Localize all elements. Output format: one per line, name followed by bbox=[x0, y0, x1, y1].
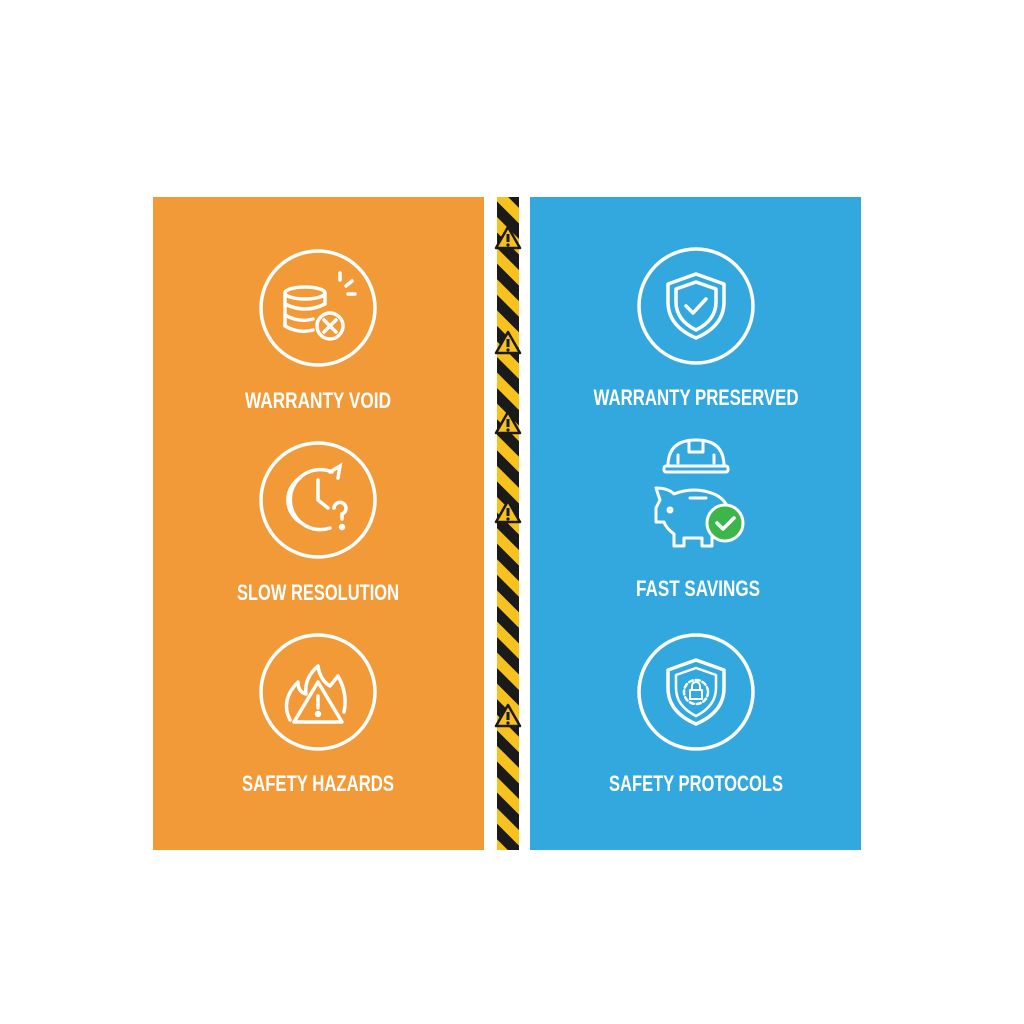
panel: blue right bbox=[530, 197, 861, 850]
label: safety hazards: SAFETY HAZARDS bbox=[242, 771, 394, 796]
icon: hard hat and piggy bank bbox=[656, 440, 743, 546]
label: fast savings: FAST SAVINGS bbox=[636, 576, 760, 601]
icon: clock with question bbox=[261, 443, 375, 557]
label: warranty void: WARRANTY VOID bbox=[245, 388, 391, 413]
hazard stripe divider bbox=[496, 197, 520, 850]
label: slow resolution: SLOW RESOLUTION bbox=[237, 580, 399, 605]
icon: shield lock gear bbox=[639, 635, 753, 749]
icon: fire hazard bbox=[261, 635, 375, 749]
icon: warning signs bbox=[496, 227, 520, 726]
icon: database with x bbox=[261, 251, 375, 365]
icon: shield check bbox=[639, 249, 753, 363]
label: warranty preserved: WARRANTY PRESERVED bbox=[594, 385, 798, 410]
panel: orange left bbox=[153, 197, 484, 850]
label: safety protocols: SAFETY PROTOCOLS bbox=[609, 771, 783, 796]
